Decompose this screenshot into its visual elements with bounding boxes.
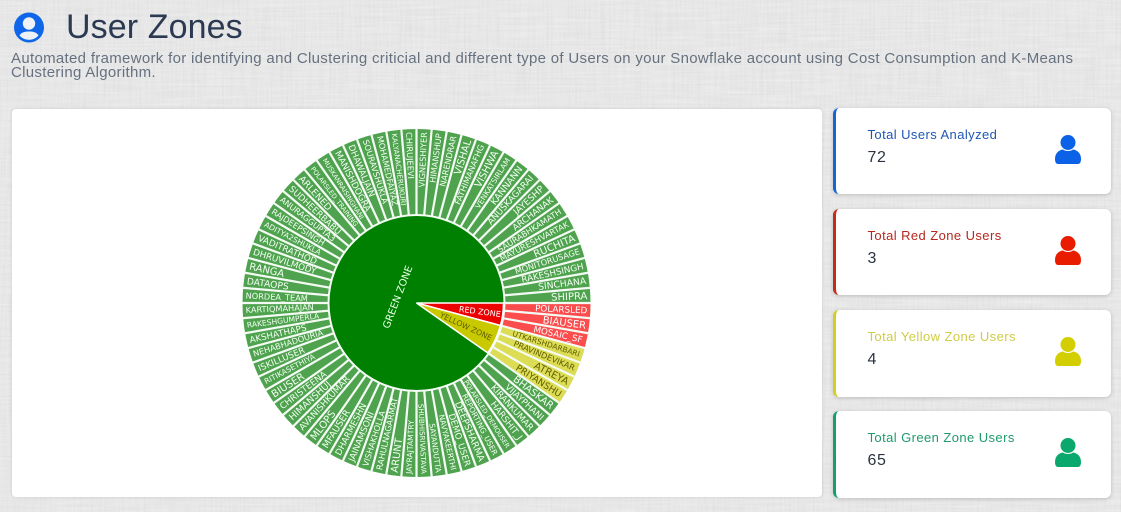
outer labels: green zone users: RAJDEEPSINGH	[270, 206, 327, 248]
outer labels: green zone users: DHARMESHN	[334, 402, 369, 457]
card: total green zone users: 65	[868, 452, 886, 469]
card: total yellow zone users	[833, 310, 1111, 397]
outer labels: red zone users	[532, 304, 588, 346]
outer labels: green zone users: CHIRUJEEVI	[404, 132, 416, 179]
inner wedge: yellow zone: YELLOW ZONE	[437, 310, 493, 343]
outer labels: green zone users: RAHULNAGARMAT	[374, 396, 400, 471]
outer labels: green zone users: AKSHATHAPS	[249, 323, 308, 346]
outer labels: green zone users: RITIKASETHIYA	[263, 352, 317, 386]
subtitle text	[11, 50, 1073, 81]
outer labels: green zone users: BIUSER	[270, 371, 307, 400]
card: total red zone users	[833, 209, 1111, 295]
outer labels: green zone users	[245, 132, 588, 475]
outer labels: green zone users: MAYURESHVARTAK	[498, 219, 571, 263]
outer labels: green zone users: HIMANSHUJ	[287, 379, 333, 423]
outer labels: green zone users: MOHAMEDFAIYAZ	[375, 135, 400, 207]
outer labels: green zone users: CHRISTEENA	[278, 370, 329, 412]
subtitle text: Automated framework for identifying and Clustering criticial and different type of Users on your Snowflake account using Cost Consumption and K-Means	[11, 50, 1073, 67]
panel: chart card	[12, 109, 822, 497]
outer labels: green zone users: MUSKANRAISINGHANI	[321, 157, 366, 221]
outer labels: green zone users: ARUNT	[390, 437, 405, 473]
inner wedge: red zone: RED ZONE	[458, 305, 501, 319]
outer labels: yellow zone users	[511, 329, 581, 400]
outer labels: green zone users: SUDHEERBABU	[286, 185, 343, 237]
outer labels: green zone users: RANGA	[248, 262, 285, 280]
outer labels: green zone users: POLARSLED_DEMOUSER	[462, 379, 512, 450]
outer labels: green zone users: AVANISHKUMAR	[298, 374, 352, 433]
outer labels: green zone users: ISKILLUSER	[257, 346, 307, 374]
card: total red zone users: 3	[868, 250, 877, 267]
outer labels: green zone users: ANURAGGUPTA3	[278, 195, 338, 243]
outer labels: green zone users: VADITRATHOD	[256, 234, 318, 267]
outer labels: green zone users: VENKATSIRLAM	[473, 156, 512, 210]
outer labels: green zone users: KIRANKUMAR	[488, 383, 535, 433]
card: total yellow zone users: 4	[868, 351, 877, 368]
outer labels: green zone users: DATAOPS	[246, 276, 289, 293]
outer labels: green zone users: VIGNESHIYER	[417, 132, 429, 188]
outer labels: green zone users: KALYANACHERUKURI	[390, 133, 408, 206]
outer labels: green zone users: NORDEA_TEAM	[245, 291, 308, 303]
outer labels: green zone users: KARTIQMAHAJAN	[245, 302, 314, 315]
outer labels: green zone users: RAKESHSINGH	[521, 262, 585, 286]
outer labels: green zone users: BHASKAR	[511, 374, 555, 412]
outer labels: green zone users: SINCHANA	[538, 276, 588, 293]
outer labels: green zone users: JAYESHP	[511, 183, 547, 218]
outer labels: green zone users: JAYRAJTAMTRY	[405, 420, 416, 475]
outer labels: green zone users: FATHIMANAFHG	[452, 143, 486, 206]
outer labels: green zone users: VISHWA	[473, 149, 501, 190]
outer labels: green zone users: DEEPSHARMA	[452, 400, 487, 464]
subtitle text: Clustering Algorithm.	[11, 64, 156, 81]
outer labels: green zone users: RAKESHGUMPERLA	[246, 311, 320, 330]
outer labels: green zone users: VISHAL	[453, 138, 474, 176]
card: total users analyzed	[833, 108, 1111, 194]
outer labels: yellow zone users: UTKARSHDARBARI	[511, 329, 581, 359]
inner label: green zone: GREEN ZONE	[381, 264, 415, 330]
outer labels: yellow zone users: PRAVINDEVIKAR	[512, 338, 577, 373]
outer labels: red zone users: POLARSLED	[535, 304, 588, 316]
outer labels: green zone users: RUCHITA	[532, 233, 577, 260]
outer labels: green zone users: NEHABHADOURIA	[252, 327, 325, 359]
outer labels: green zone users: DHRUVILMODY	[252, 248, 318, 277]
card: total users analyzed: Total Users Analyzed	[868, 127, 997, 142]
outer labels: green zone users: VISHAKHOLLA	[360, 409, 387, 468]
card: total users analyzed: 72	[868, 149, 886, 166]
outer labels: green zone users: REPORTING_USER	[460, 392, 500, 457]
outer labels: green zone users: VIJAYPHANI	[502, 383, 545, 423]
card: total yellow zone users: Total Yellow Zone Users	[868, 329, 1016, 344]
outer labels: green zone users: JAINAMSONI	[347, 411, 377, 464]
outer labels: green zone users: MLOPS	[309, 409, 338, 443]
outer labels: green zone users: HIMANSHUP	[427, 133, 444, 183]
outer labels: green zone users: NAVYAKEERTHI	[437, 414, 458, 471]
outer labels: green zone users: ADITYA2SHUKLA	[263, 220, 323, 257]
inner wedge: red zone	[416, 303, 504, 326]
outer labels: green zone users: NARENDRAR	[437, 135, 458, 188]
outer labels: yellow zone users: ATREYA	[532, 361, 570, 388]
outer labels: green zone users: ARLENED	[296, 174, 334, 213]
outer labels: green zone users: SHIPRA	[551, 291, 588, 304]
outer labels: green zone users: POLARSLED_TRAINING	[309, 165, 360, 228]
icon: user circle	[14, 12, 44, 42]
title: User Zones	[66, 8, 243, 46]
outer labels: green zone users: HARSHIT_J	[488, 400, 524, 442]
outer labels: red zone users: MOSAIC_SF	[532, 325, 583, 346]
outer labels: green zone users: SHUBHISRIVASTAVA	[416, 404, 428, 474]
outer labels: red zone users: BIAUSER	[542, 315, 587, 332]
outer labels: green zone users: SOURAVSHUKLA	[361, 138, 391, 205]
inner wedge: yellow zone	[416, 303, 500, 353]
outer labels: green zone users: ARCHANAK	[511, 196, 556, 233]
outer labels: green zone users: SAYANDUTTA	[427, 423, 443, 474]
card: total green zone users: Total Green Zone Users	[868, 430, 1015, 445]
outer labels: green zone users: MONITORUSAGE	[514, 246, 581, 276]
outer labels: yellow zone users: PRIYANSHU	[514, 363, 563, 400]
outer labels: green zone users: MFAUSER	[320, 407, 353, 450]
outer labels: green zone users: SAURABHKAMATH	[496, 206, 563, 255]
outer labels: green zone users: KANNANN	[489, 164, 525, 207]
outer labels: green zone users: ANUSKAGARAI	[486, 174, 536, 227]
card: total red zone users: Total Red Zone Users	[868, 228, 1002, 243]
outer labels: green zone users: MANISHDOGRA	[332, 149, 372, 214]
card: total green zone users	[833, 411, 1111, 498]
outer labels: green zone users: DEMO_USER	[446, 412, 472, 468]
outer labels: green zone users: DHAWALJAIN	[346, 143, 376, 199]
